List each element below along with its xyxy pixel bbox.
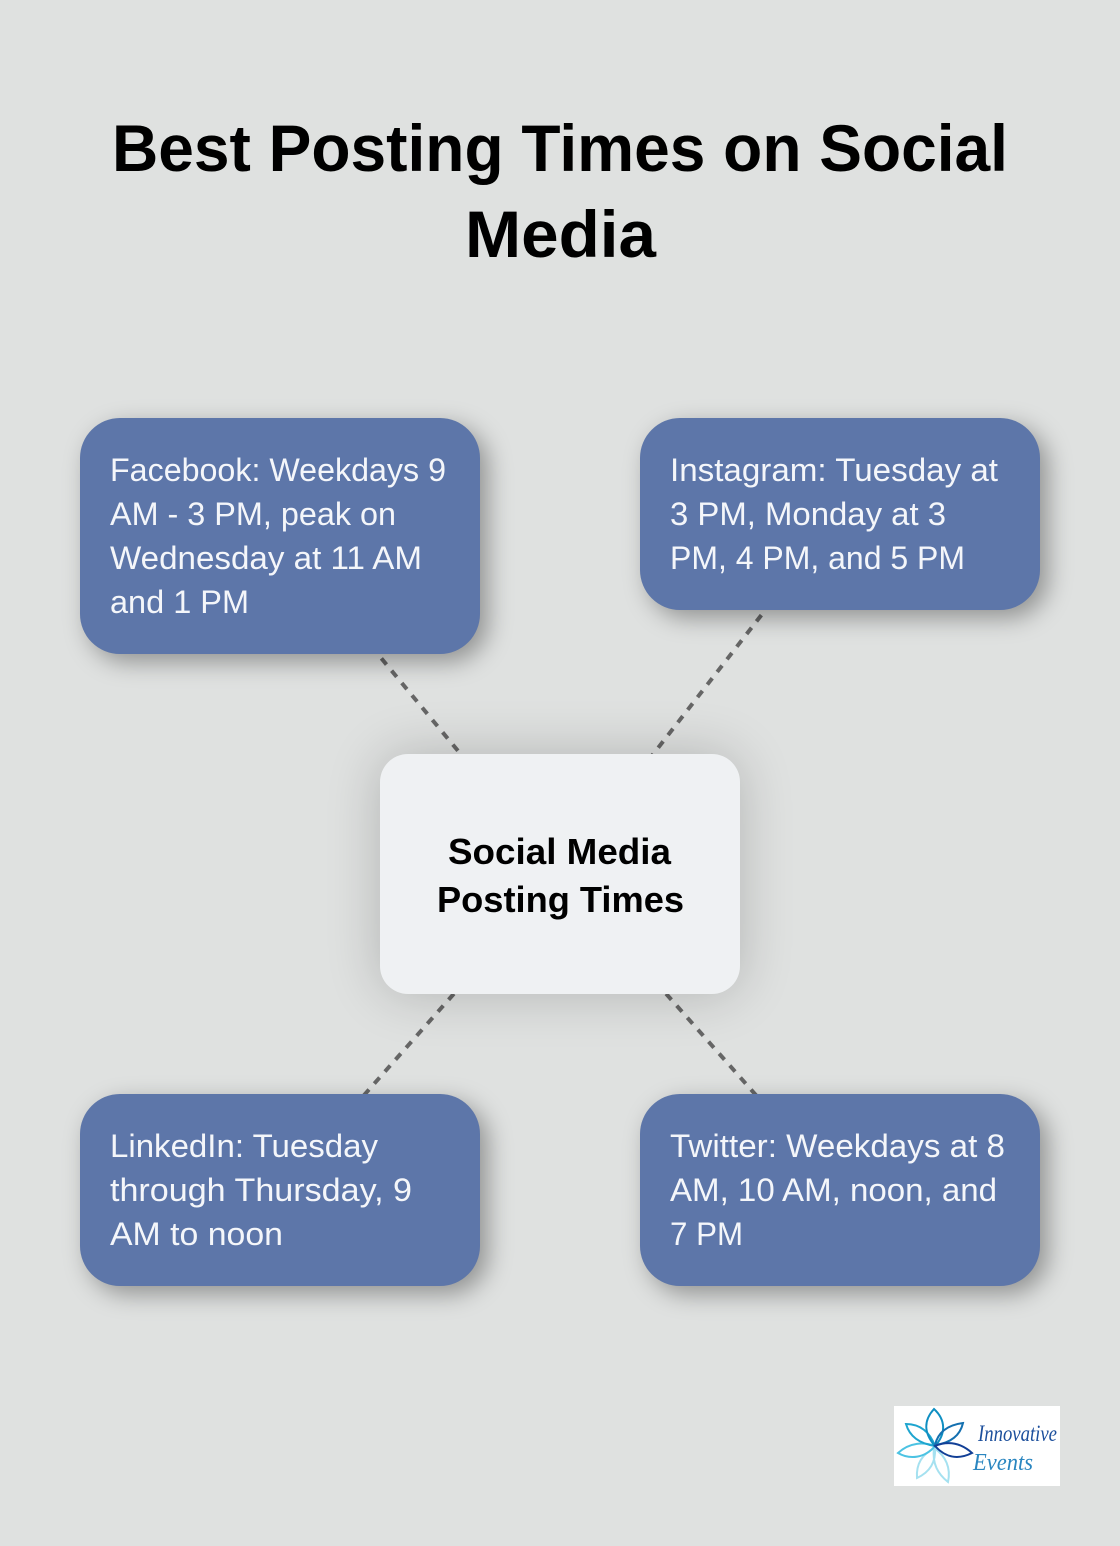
title [112, 111, 1008, 271]
panel: Facebook: Facebook: Weekdays 9 [110, 452, 446, 488]
panel: Twitter: Twitter: Weekdays at 8 [670, 1128, 1005, 1164]
panel: center topic [380, 754, 740, 994]
panel: Facebook: and 1 PM [110, 584, 249, 620]
panel: Twitter: 7 PM [670, 1216, 743, 1252]
title: Media [465, 197, 657, 271]
panel: Facebook [80, 418, 480, 654]
logo: Innovative Events: Innovative [977, 1421, 1057, 1446]
title: Best Posting Times on Social [112, 111, 1008, 185]
panel: LinkedIn [80, 1094, 480, 1286]
panel: Instagram: 3 PM, Monday at 3 [670, 496, 946, 532]
panel: Twitter [640, 1094, 1040, 1286]
panel: Facebook: AM - 3 PM, peak on [110, 496, 396, 532]
panel: LinkedIn: AM to noon [110, 1216, 283, 1252]
panel: Instagram: Instagram: Tuesday at [670, 452, 998, 488]
panel: Twitter: AM, 10 AM, noon, and [670, 1172, 997, 1208]
panel: LinkedIn: through Thursday, 9 [110, 1172, 412, 1208]
logo: Innovative Events [894, 1406, 1060, 1486]
logo: Innovative Events: Events [972, 1450, 1033, 1476]
panel: center topic: Posting Times [437, 879, 684, 920]
panel: Instagram [640, 418, 1040, 610]
panel: Instagram: PM, 4 PM, and 5 PM [670, 540, 965, 576]
panel: Facebook: Wednesday at 11 AM [110, 540, 422, 576]
panel: LinkedIn: LinkedIn: Tuesday [110, 1128, 378, 1164]
panel: center topic: Social Media [448, 831, 672, 872]
